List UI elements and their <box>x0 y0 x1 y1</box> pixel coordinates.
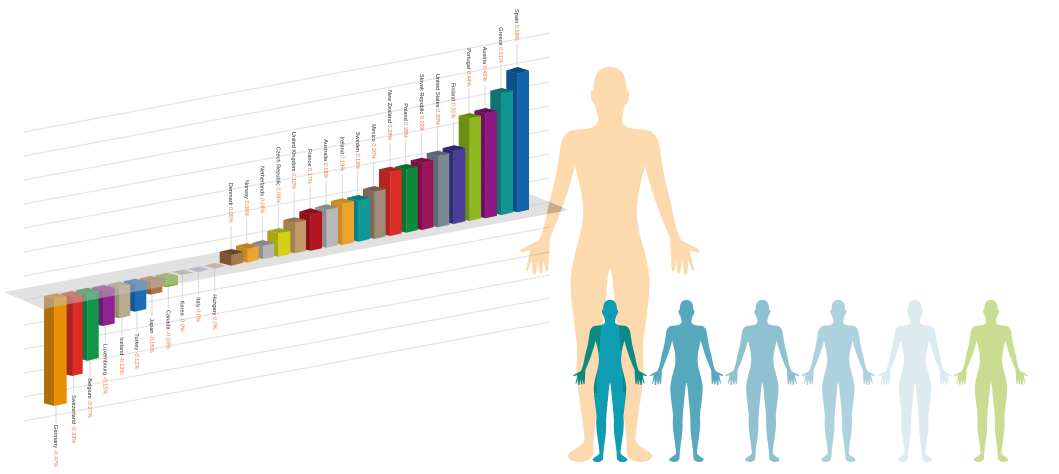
bar: Austria 0.45% <box>474 47 497 218</box>
small figure 2: teal <box>650 300 723 462</box>
bar: Ireland 0.19%: Ireland 0.19% <box>338 137 344 171</box>
bar: France 0.17%: France 0.17% <box>306 149 312 184</box>
bar: Netherlands 0.08% <box>252 166 274 259</box>
bar: Germany -0.47%: Germany -0.47% <box>52 425 58 467</box>
bar: Finland 0.31%: Finland 0.31% <box>449 83 455 118</box>
bar: Norway 0.06% <box>236 180 259 263</box>
bar: Mexico 0.20%: Mexico 0.20% <box>370 124 376 159</box>
bar: Australia 0.18% <box>315 139 338 248</box>
bar: Japan -0.05%: Japan -0.05% <box>148 318 154 353</box>
bar: Turkey -0.12%: Turkey -0.12% <box>133 333 139 370</box>
bar: Finland 0.31% <box>443 83 465 224</box>
bar: New Zealand 0.28% <box>379 90 402 236</box>
bar: Canada -0.03% <box>155 273 178 349</box>
bar: Mexico 0.20% <box>363 124 386 239</box>
small figure 6: green <box>954 300 1028 462</box>
bar: Spain 0.58%: Spain 0.58% <box>513 9 519 41</box>
chart grid lines <box>24 33 550 421</box>
bar: Portugal 0.44% <box>459 48 481 221</box>
plane overlap on arm of large figure <box>547 202 562 214</box>
bar: Slovak Republic 0.29% <box>411 74 433 230</box>
small figure 1: dark teal with highlighted body <box>573 300 647 462</box>
bar: Poland 0.28% <box>395 103 418 233</box>
small figure 3: light teal <box>725 300 799 462</box>
bar: Hungary 0.0% <box>204 263 226 330</box>
small figure 5: very pale blue <box>878 300 952 462</box>
bar: Sweden 0.19%: Sweden 0.19% <box>354 132 360 169</box>
bar: Iceland -0.13% <box>108 282 130 375</box>
bar: Poland 0.28%: Poland 0.28% <box>402 103 408 138</box>
bar: Korea -0.0% <box>172 270 193 332</box>
bar: Luxembourg -0.15%: Luxembourg -0.15% <box>101 344 107 394</box>
bar: Netherlands 0.08%: Netherlands 0.08% <box>258 166 264 214</box>
bar: United Kingdom 0.12% <box>283 132 306 253</box>
bar: Germany -0.47% <box>44 293 67 467</box>
bar: Spain 0.58% <box>506 9 529 212</box>
bar: Belgium -0.27% <box>76 288 99 418</box>
translucent zero plane <box>4 194 569 309</box>
bar: Czech Republic 0.09%: Czech Republic 0.09% <box>274 147 280 203</box>
bar: United States 0.30%: United States 0.30% <box>434 74 440 125</box>
bar: Canada -0.03%: Canada -0.03% <box>164 310 170 349</box>
bar: Ireland 0.19% <box>331 137 354 245</box>
bar: Belgium -0.27%: Belgium -0.27% <box>86 378 92 418</box>
bar: Turkey -0.12% <box>124 279 146 370</box>
large peach body figure <box>520 67 700 462</box>
bar: Italy 0.0% <box>188 267 209 322</box>
bar: Iceland -0.13%: Iceland -0.13% <box>118 337 124 375</box>
bar: Greece 0.51% <box>490 27 513 215</box>
bar: Slovak Republic 0.29%: Slovak Republic 0.29% <box>418 74 424 132</box>
bar: Hungary 0.0%: Hungary 0.0% <box>211 294 217 330</box>
bar: Czech Republic 0.09% <box>267 147 290 257</box>
bar: Norway 0.06%: Norway 0.06% <box>243 180 249 216</box>
bar: Switzerland -0.33%: Switzerland -0.33% <box>70 395 76 443</box>
bar: Denmark 0.05%: Denmark 0.05% <box>227 183 233 223</box>
bar: Sweden 0.19% <box>347 132 370 242</box>
bar: United States 0.30% <box>427 74 449 227</box>
small figure 4: pale blue <box>801 300 875 462</box>
bar: New Zealand 0.28%: New Zealand 0.28% <box>386 90 392 140</box>
bar: Korea -0.0%: Korea -0.0% <box>178 301 184 332</box>
bar: Denmark 0.05% <box>220 183 243 266</box>
bar: Japan -0.05% <box>139 276 162 353</box>
bar: Portugal 0.44%: Portugal 0.44% <box>465 48 471 87</box>
bar: Greece 0.51%: Greece 0.51% <box>497 27 503 63</box>
bar: Luxembourg -0.15% <box>92 285 115 394</box>
bar: France 0.17% <box>299 149 322 251</box>
bar: United Kingdom 0.12%: United Kingdom 0.12% <box>290 132 296 189</box>
bar: Austria 0.45%: Austria 0.45% <box>481 47 487 82</box>
bar: Switzerland -0.33% <box>61 291 83 443</box>
bar: Australia 0.18%: Australia 0.18% <box>322 139 328 179</box>
bar: Italy 0.0%: Italy 0.0% <box>194 297 200 322</box>
